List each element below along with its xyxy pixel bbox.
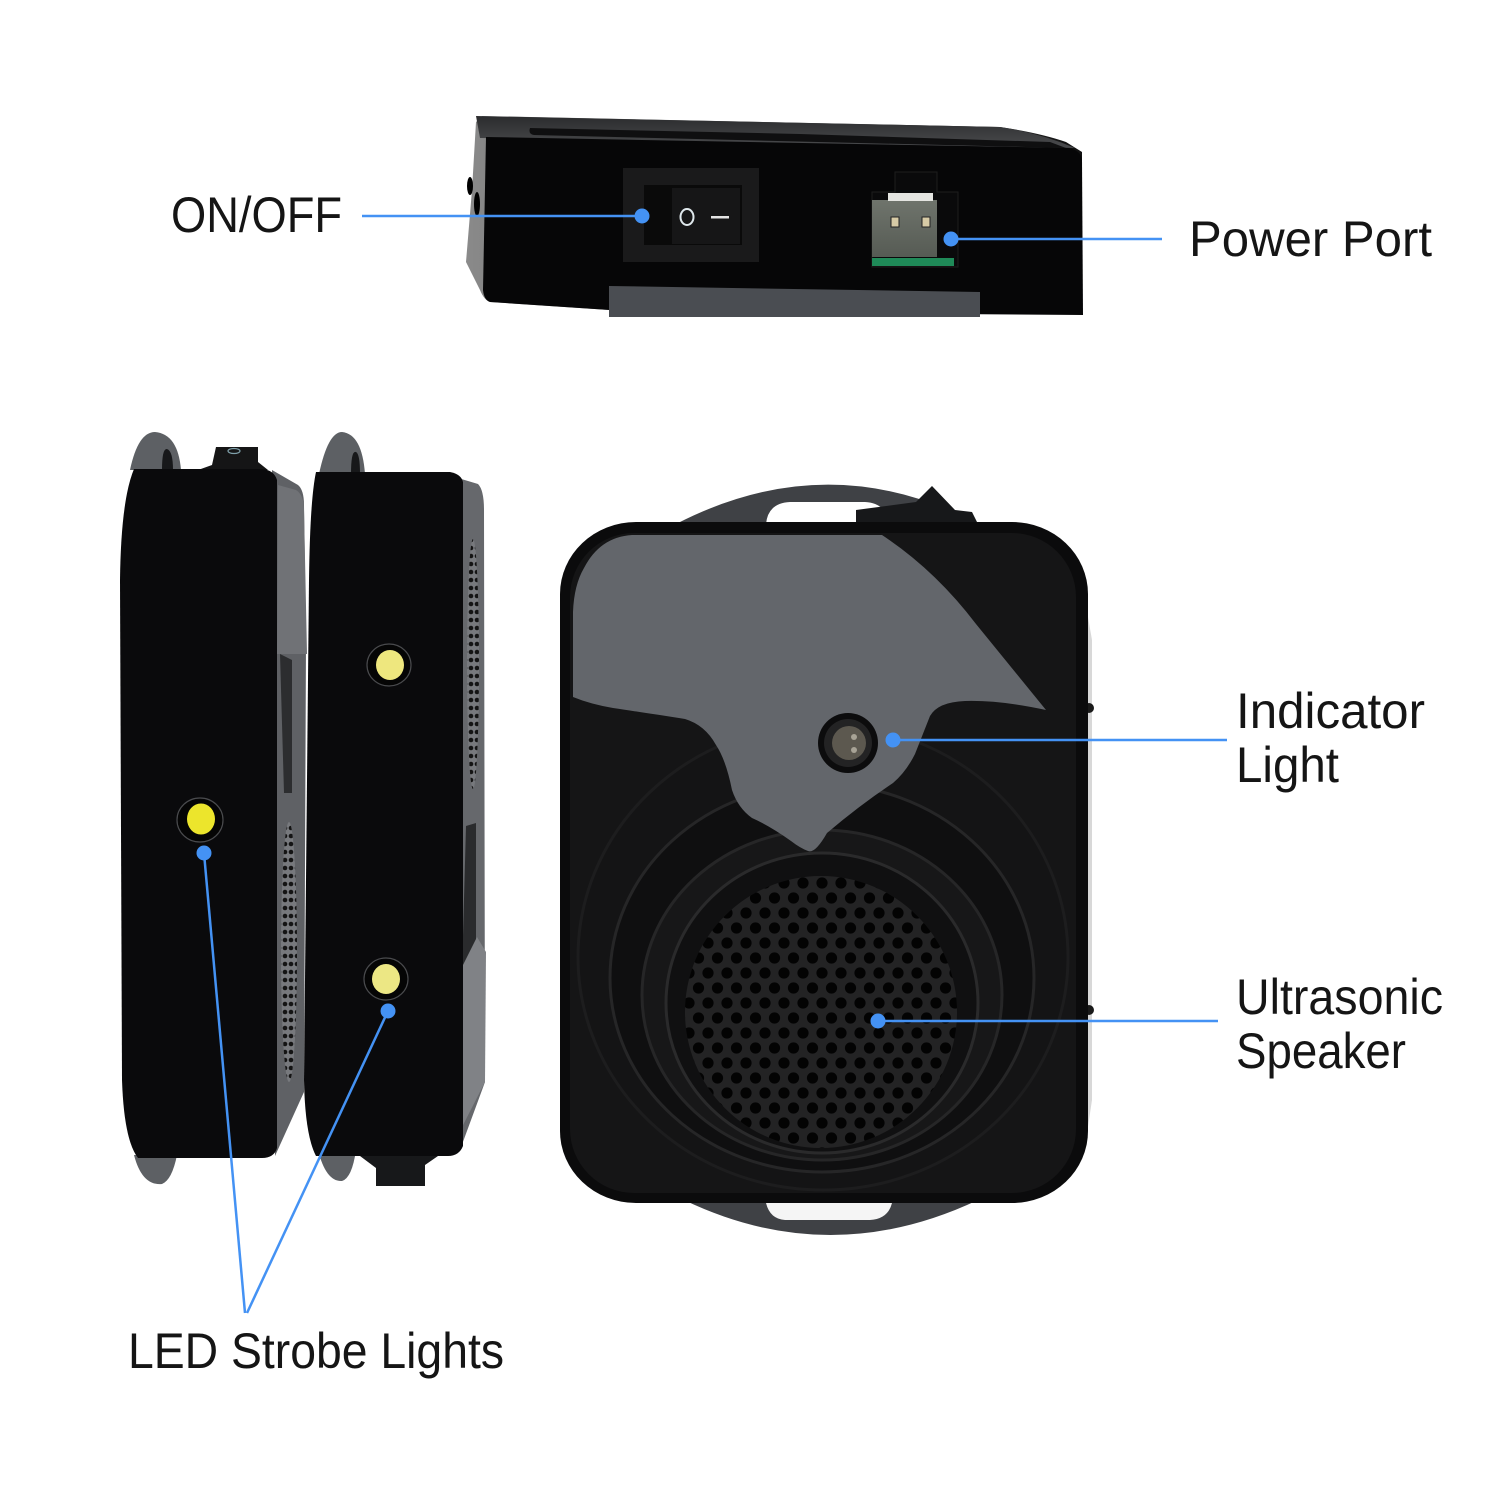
left side device (120, 432, 307, 1184)
label: ultrasonic speaker: Ultrasonic (1236, 969, 1443, 1025)
callout: ultrasonic speaker (870, 969, 1443, 1079)
front view device (560, 485, 1094, 1235)
indicator light (818, 713, 878, 773)
label: ultrasonic speaker: Speaker (1236, 1023, 1406, 1079)
concentric rings (578, 724, 1068, 1190)
right side device (304, 432, 486, 1186)
callout: indicator light (886, 683, 1425, 793)
on/off rocker switch (623, 168, 759, 262)
mounting bracket (676, 485, 978, 1235)
top view device (466, 116, 1083, 317)
label: indicator light: Light (1236, 737, 1339, 793)
callout: on/off (171, 187, 650, 243)
label: ultrasonic speaker (1236, 969, 1443, 1079)
LED: lower right device (364, 958, 408, 1000)
grey panel (573, 535, 1046, 851)
LED: upper right device (367, 644, 411, 686)
LED: left device (177, 798, 223, 842)
label: power port: Power Port (1189, 211, 1432, 267)
label: on/off: ON/OFF (171, 187, 342, 243)
callout: power port (944, 211, 1432, 267)
power port (872, 172, 958, 267)
label: indicator light: Indicator (1236, 683, 1425, 739)
label: indicator light (1236, 683, 1425, 793)
label: LED strobe lights: LED Strobe Lights (128, 1323, 504, 1379)
speaker grille (685, 876, 957, 1148)
callout: LED strobe lights (128, 846, 504, 1379)
grey base tab (609, 286, 980, 317)
